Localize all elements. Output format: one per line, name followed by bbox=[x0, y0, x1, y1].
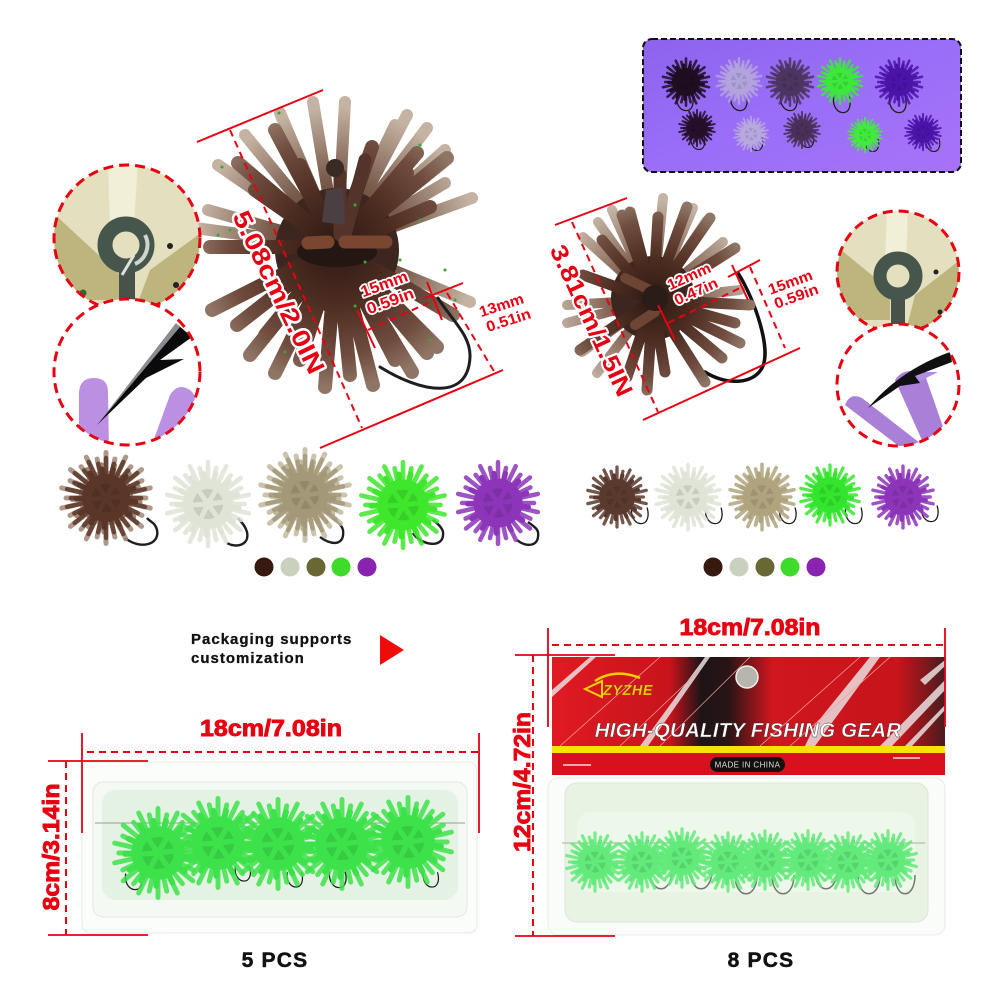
dashed line bbox=[572, 222, 658, 412]
tray lures bbox=[567, 829, 916, 891]
tan variant small bbox=[730, 464, 794, 530]
brand logo: ZYZHE bbox=[602, 683, 654, 699]
8 pcs card pack bbox=[548, 657, 945, 935]
white variant bbox=[167, 462, 249, 546]
colour swatches right bbox=[704, 558, 826, 576]
top line bbox=[555, 198, 627, 225]
card footer bbox=[552, 753, 945, 775]
variant hooks left bbox=[125, 518, 538, 545]
colour swatches left bbox=[254, 558, 376, 576]
gap marker lines bbox=[357, 282, 463, 348]
label 13mm: 13mm bbox=[477, 291, 526, 321]
label 15mm: 15mm bbox=[359, 268, 410, 301]
colour variants left bbox=[62, 450, 538, 548]
label height: 8cm/3.14in bbox=[38, 783, 64, 911]
8 pcs dimensions bbox=[509, 614, 945, 936]
label 5.08cm: 5.08cm/2.0IN bbox=[227, 206, 330, 379]
green variant small bbox=[801, 465, 859, 525]
width dashed line bbox=[230, 130, 362, 428]
packaging note: Packaging supports bbox=[191, 631, 352, 648]
label 5 pcs: 5 PCS bbox=[242, 949, 308, 972]
UV photo panel bbox=[643, 39, 961, 172]
5 pcs blister pack bbox=[82, 762, 477, 933]
label 3.81cm: 3.81cm/1.5IN bbox=[544, 241, 638, 401]
medium brown lure bbox=[567, 198, 765, 390]
width line bottom bbox=[320, 370, 503, 448]
label 0.47in: 0.47in bbox=[672, 275, 721, 309]
pack lures bbox=[115, 797, 451, 898]
5 pcs dimensions bbox=[38, 715, 479, 935]
gap dashed bbox=[368, 303, 428, 330]
card hang hole bbox=[736, 666, 758, 688]
detail circle: eyelet left bbox=[50, 160, 205, 311]
green variant bbox=[361, 462, 445, 548]
width line top bbox=[197, 90, 323, 142]
label 0.51in: 0.51in bbox=[484, 306, 533, 336]
medium core bbox=[625, 278, 655, 325]
brown variant bbox=[62, 453, 150, 543]
UV lures top row bbox=[663, 58, 922, 106]
UV lures bottom row bbox=[679, 110, 941, 152]
yellow band bbox=[552, 746, 945, 753]
lure body bbox=[275, 188, 399, 312]
gap marks bbox=[658, 260, 760, 340]
brown variant small bbox=[588, 467, 646, 527]
label 0.59in: 0.59in bbox=[365, 285, 416, 318]
card headline: HIGH-QUALITY FISHING GEAR bbox=[595, 719, 901, 742]
medium body bbox=[611, 256, 695, 340]
label 15mm right: 15mm bbox=[766, 267, 815, 299]
UV hooks bbox=[676, 95, 940, 152]
purple variant small bbox=[873, 466, 933, 528]
medium hook bbox=[705, 273, 765, 381]
hook dashed bbox=[447, 293, 495, 373]
bottom line bbox=[643, 348, 800, 420]
medium front spikes bbox=[580, 207, 750, 390]
tan variant bbox=[261, 450, 349, 540]
arrow: to packaging bbox=[380, 635, 404, 665]
medium lure dimensions bbox=[544, 198, 821, 420]
variant hooks right bbox=[631, 506, 938, 524]
label width: 18cm/7.08in bbox=[680, 614, 820, 640]
label 0.59in right: 0.59in bbox=[772, 281, 821, 313]
detail circle: hook point left bbox=[50, 295, 205, 450]
made in china pill: MADE IN CHINA bbox=[715, 761, 781, 770]
white variant small bbox=[656, 464, 720, 530]
lure core bbox=[297, 237, 377, 267]
lure hook bbox=[380, 298, 470, 388]
packaging note: customization bbox=[191, 650, 305, 667]
big lure dimensions bbox=[197, 90, 533, 448]
large brown lure bbox=[195, 102, 472, 388]
label width: 18cm/7.08in bbox=[200, 715, 342, 741]
detail circle: hook point right bbox=[835, 322, 960, 450]
label 12mm: 12mm bbox=[665, 260, 714, 294]
label 8 pcs: 8 PCS bbox=[728, 949, 794, 972]
lure back spikes bbox=[195, 102, 472, 302]
blister tray bbox=[548, 778, 945, 935]
label height: 12cm/4.72in bbox=[509, 712, 535, 852]
colour variants right bbox=[588, 464, 938, 530]
header card bbox=[552, 657, 945, 775]
detail circle: eyelet right bbox=[835, 208, 960, 336]
made in china pill bbox=[710, 757, 785, 772]
pack hooks bbox=[125, 867, 438, 890]
medium back spikes bbox=[567, 198, 740, 373]
lure front spikes bbox=[210, 130, 453, 387]
purple variant bbox=[458, 462, 538, 544]
lure speckles bbox=[218, 113, 455, 352]
